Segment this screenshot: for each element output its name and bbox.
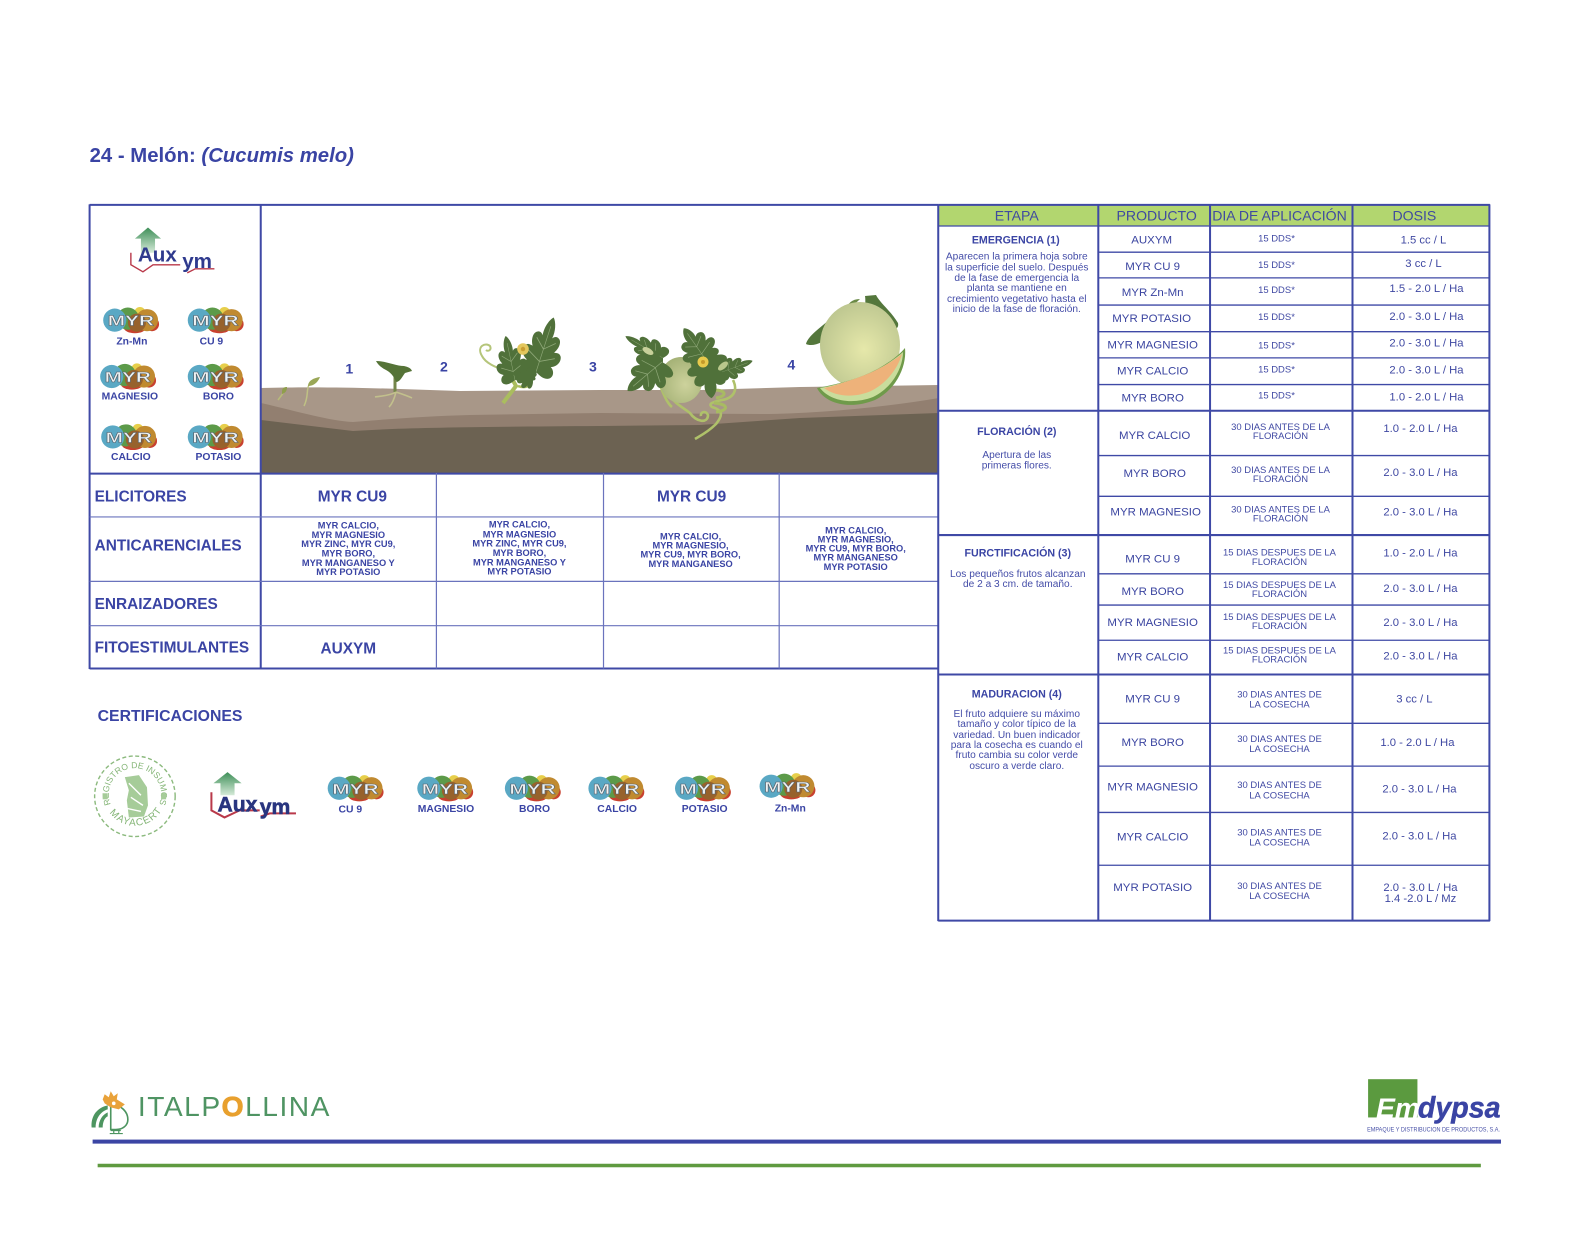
column: día de aplicación: LA COSECHA: [1249, 700, 1310, 711]
stage: fructificación: Los pequeños frutos alcanzan: [950, 569, 1086, 580]
column: dosis: 1.4 -2.0 L / Mz: [1385, 893, 1457, 905]
stage: maduración: fruto cambia su color verde: [956, 750, 1078, 761]
cell: anticarenciales stage 3: MYR MANGANESO: [648, 559, 733, 569]
stage: emergencia: [945, 235, 1088, 315]
logo: Auxym: [131, 228, 214, 273]
stage: emergencia: planta se mantiene en: [967, 283, 1067, 294]
column: día de aplicación: 30 DIAS ANTES DE: [1237, 780, 1322, 791]
logo: Italpollina: [92, 1090, 331, 1134]
cell: elicitor stage 1: MYR CU9: [318, 488, 387, 505]
table header band: [938, 205, 1489, 226]
logo: Emdypsa: dypsa: [1418, 1092, 1500, 1124]
column: día de aplicación: LA COSECHA: [1249, 838, 1310, 849]
cell: anticarenciales stage 4: MYR CALCIO,: [825, 526, 886, 536]
stage: maduración: tamaño y color típico de la: [957, 719, 1076, 730]
column: dosis: 1.0 - 2.0 L / Ha: [1383, 423, 1458, 435]
cell: anticarenciales stage 1: MYR MAGNESIO: [312, 530, 385, 540]
row label: enraizadores: ENRAIZADORES: [95, 596, 218, 613]
logo: Magnesio: MAGNESIO: [418, 804, 474, 815]
cell: anticarenciales stage 3: MYR MAGNESIO,: [653, 541, 729, 551]
column: productos: MYR CU 9: [1125, 694, 1180, 706]
column: productos: MYR MAGNESIO: [1107, 781, 1198, 793]
stage: maduración: MADURACION (4): [972, 689, 1062, 701]
column: dosis: 1.5 - 2.0 L / Ha: [1389, 283, 1464, 295]
column: dosis: 1.0 - 2.0 L / Ha: [1383, 548, 1458, 560]
logo: MYR Boro: MYR: [192, 369, 239, 386]
cell: anticarenciales stage 4: MYR POTASIO: [824, 562, 888, 572]
column: dosis: 2.0 - 3.0 L / Ha: [1383, 650, 1458, 662]
column: día de aplicación: 15 DDS*: [1258, 234, 1295, 245]
column: día de aplicación: 15 DDS*: [1258, 391, 1295, 402]
table header band: PRODUCTO: [1117, 207, 1197, 223]
stage: floración: [977, 425, 1057, 472]
stage: maduración: para la cosecha es cuando el: [951, 740, 1083, 751]
column: dosis: 1.5 cc / L: [1401, 235, 1446, 247]
column: día de aplicación: 15 DIAS DESPUES DE LA: [1223, 580, 1337, 591]
column: productos: MYR Zn-Mn: [1122, 287, 1184, 299]
column: día de aplicación: [1223, 234, 1337, 902]
column: productos: MYR BORO: [1121, 393, 1184, 405]
column: dosis: 2.0 - 3.0 L / Ha: [1382, 783, 1457, 795]
column: dosis: 2.0 - 3.0 L / Ha: [1383, 506, 1458, 518]
column: día de aplicación: 30 DIAS ANTES DE: [1237, 734, 1322, 745]
logo: MYR Potasio: MYR: [192, 429, 239, 446]
column: productos: MYR MAGNESIO: [1107, 617, 1198, 629]
column: dosis: 3 cc / L: [1396, 694, 1433, 706]
logo: Magnesio: MYR: [422, 781, 468, 798]
column: productos: MYR CU 9: [1125, 554, 1180, 566]
column: día de aplicación: 30 DIAS ANTES DE: [1237, 690, 1322, 701]
cell: anticarenciales stage 1: MYR POTASIO: [316, 567, 380, 577]
logo: Auxym: ym: [182, 250, 212, 273]
logo: MYR Potasio: [188, 424, 244, 463]
cell: anticarenciales stage 2: MYR BORO,: [493, 548, 546, 558]
table header band: DOSIS: [1392, 207, 1436, 223]
column: día de aplicación: FLORACIÓN: [1252, 589, 1307, 600]
column: dosis: 2.0 - 3.0 L / Ha: [1389, 337, 1464, 349]
column: productos: MYR POTASIO: [1112, 313, 1191, 325]
panel: product logos: [100, 228, 244, 463]
column: día de aplicación: FLORACIÓN: [1252, 557, 1307, 568]
logo: MYR CU 9: MYR: [192, 313, 239, 330]
heading: certificaciones: CERTIFICACIONES: [98, 708, 242, 725]
logo: MYR Zn-Mn: Zn-Mn: [116, 336, 147, 347]
stage: emergencia: crecimiento vegetativo hasta el: [947, 294, 1086, 305]
column: dosis: 1.0 - 2.0 L / Ha: [1380, 737, 1455, 749]
cell: anticarenciales stage 4: MYR CU9, MYR BORO,: [806, 544, 906, 554]
logo: CU 9: MYR: [332, 781, 379, 798]
stage: maduración: oscuro a verde claro.: [969, 761, 1064, 772]
column: productos: MYR CALCIO: [1117, 366, 1188, 378]
logo: Auxym certification: ym: [260, 796, 290, 819]
cell: anticarenciales stage 4: MYR MANGANESO: [814, 553, 898, 563]
logo: MYR Calcio: [101, 424, 157, 463]
panel: certification logos: [94, 755, 816, 838]
column: día de aplicación: 15 DIAS DESPUES DE LA: [1223, 548, 1337, 559]
logo: Calcio: [588, 775, 644, 815]
logo: Emdypsa: Em: [1376, 1091, 1420, 1123]
stage: maduración: [951, 689, 1083, 772]
logo: Boro: MYR: [509, 781, 556, 798]
logo: CU 9: [328, 775, 384, 815]
footer rule: green: [98, 1164, 1481, 1167]
logo: MYR Zn-Mn: MYR: [108, 313, 154, 330]
column: día de aplicación: FLORACIÓN: [1253, 431, 1308, 442]
logo: MYR Boro: [188, 363, 244, 403]
logo: Auxym certification: [211, 772, 296, 819]
logo: Zn-Mn: [760, 773, 815, 814]
logo: Magnesio: [417, 775, 474, 815]
column: día de aplicación: 15 DDS*: [1258, 285, 1295, 296]
stage: fructificación: de 2 a 3 cm. de tamaño.: [963, 579, 1073, 590]
column: dosis: 2.0 - 3.0 L / Ha: [1383, 467, 1458, 479]
column: productos: MYR CALCIO: [1119, 430, 1190, 442]
stamp: Mayacert: MAYACERT: [110, 806, 160, 826]
column: productos: MYR BORO: [1123, 468, 1186, 480]
logo: Emdypsa: [1367, 1079, 1500, 1134]
column: día de aplicación: 15 DIAS DESPUES DE LA: [1223, 612, 1337, 623]
column: productos: MYR BORO: [1121, 586, 1184, 598]
row label: anticarenciales: ANTICARENCIALES: [95, 538, 242, 555]
logo: MYR Magnesio: [100, 363, 158, 403]
column: día de aplicación: 30 DIAS ANTES DE: [1237, 881, 1322, 892]
stage: emergencia: la superficie del suelo. Después: [945, 262, 1088, 273]
column: productos: AUXYM: [1131, 235, 1172, 247]
illustration: young plant with first leaf: [375, 361, 412, 407]
stamp: Mayacert: [94, 755, 176, 838]
column: día de aplicación: 15 DDS*: [1258, 260, 1295, 271]
stage: floración: primeras flores.: [982, 461, 1052, 472]
cell: anticarenciales stage 4: MYR MAGNESIO,: [818, 535, 894, 545]
stamp: Mayacert: REGISTRO DE INSUMOS: [102, 762, 167, 806]
stage number 1: 1: [345, 360, 353, 376]
column: dosis: 2.0 - 3.0 L / Ha: [1383, 617, 1458, 629]
column: día de aplicación: 15 DIAS DESPUES DE LA: [1223, 645, 1337, 656]
column: día de aplicación: LA COSECHA: [1249, 891, 1310, 902]
logo: MYR CU 9: [188, 307, 244, 347]
stage: floración: FLORACIÓN (2): [977, 425, 1057, 438]
column: productos: MYR CU 9: [1125, 261, 1180, 273]
panel: product category table: [90, 204, 938, 669]
column: productos: [1107, 235, 1201, 894]
column: día de aplicación: FLORACIÓN: [1253, 513, 1308, 524]
logo: Zn-Mn: MYR: [764, 779, 811, 796]
column: dosis: 2.0 - 3.0 L / Ha: [1389, 311, 1464, 323]
column: dosis: 2.0 - 3.0 L / Ha: [1383, 583, 1458, 595]
cell: anticarenciales stage 4: [806, 526, 906, 572]
logo: Calcio: CALCIO: [597, 804, 637, 815]
title: 24 - Melón: (Cucumis melo): [90, 145, 354, 167]
cell: anticarenciales stage 1: MYR MANGANESO Y: [302, 558, 396, 568]
column: dosis: 2.0 - 3.0 L / Ha: [1382, 831, 1457, 843]
cell: anticarenciales stage 1: MYR CALCIO,: [318, 521, 379, 531]
cell: fitoestimulante stage 1: AUXYM: [321, 640, 376, 657]
cell: elicitor stage 3: MYR CU9: [657, 488, 726, 505]
row label: fitoestimulantes: FITOESTIMULANTES: [95, 639, 249, 656]
cell: anticarenciales stage 3: MYR CU9, MYR BORO,: [640, 550, 741, 560]
column: día de aplicación: LA COSECHA: [1249, 790, 1310, 801]
column: día de aplicación: FLORACIÓN: [1252, 654, 1307, 665]
soil layers: [261, 385, 939, 474]
cell: anticarenciales stage 2: MYR POTASIO: [487, 566, 551, 576]
column: día de aplicación: 30 DIAS ANTES DE LA: [1231, 465, 1331, 476]
wordmark: ITALPOLLINA: [138, 1090, 331, 1122]
logo: Calcio: MYR: [593, 781, 639, 798]
stage: maduración: variedad. Un buen indicador: [953, 730, 1081, 741]
stage: emergencia: Aparecen la primera hoja sobre: [946, 252, 1088, 263]
cell: anticarenciales stage 2: [472, 520, 567, 576]
column: día de aplicación: 15 DDS*: [1258, 312, 1295, 323]
logo: MYR Calcio: CALCIO: [111, 452, 151, 463]
cell: anticarenciales stage 1: MYR ZINC, MYR CU9,: [301, 539, 395, 549]
stage: maduración: El fruto adquiere su máximo: [954, 709, 1080, 720]
logo: Potasio: POTASIO: [682, 804, 728, 815]
panel: crop growth stages illustration: [261, 295, 939, 474]
logo: MYR Magnesio: MYR: [105, 369, 151, 386]
illustration: seedlings sprouting: [278, 377, 320, 406]
column: día de aplicación: 15 DDS*: [1258, 364, 1295, 375]
logo: CU 9: CU 9: [339, 804, 362, 815]
stage: emergencia: inicio de la fase de floración.: [953, 304, 1081, 315]
column: productos: MYR POTASIO: [1113, 882, 1192, 894]
logo: MYR CU 9: CU 9: [200, 336, 223, 347]
logo: MYR Boro: BORO: [203, 392, 234, 403]
column: día de aplicación: 30 DIAS ANTES DE LA: [1231, 422, 1331, 433]
logo: Boro: [505, 775, 561, 815]
column: productos: MYR CALCIO: [1117, 832, 1188, 844]
column: dosis: 2.0 - 3.0 L / Ha: [1383, 882, 1458, 894]
column: dosis: 3 cc / L: [1405, 258, 1442, 270]
logo: Boro: BORO: [519, 804, 550, 815]
footer rule: blue: [93, 1140, 1501, 1144]
stage: emergencia: EMERGENCIA (1): [972, 235, 1060, 247]
logo: Potasio: [675, 775, 731, 815]
column: día de aplicación: 30 DIAS ANTES DE LA: [1231, 504, 1331, 515]
table header band: DIA DE APLICACIÓN: [1212, 207, 1347, 223]
logo: MYR Calcio: MYR: [106, 429, 152, 446]
stage: fructificación: FURCTIFICACIÓN (3): [964, 547, 1071, 560]
illustration: flowering plant: [480, 311, 572, 403]
panel: application schedule table: [938, 204, 1490, 921]
logo: Zn-Mn: Zn-Mn: [775, 803, 806, 814]
stage number 2: 2: [440, 358, 448, 374]
column: productos: MYR BORO: [1121, 737, 1184, 749]
logo: MYR Zn-Mn: [103, 307, 159, 347]
column: día de aplicación: FLORACIÓN: [1252, 621, 1307, 632]
column: día de aplicación: 15 DDS*: [1258, 340, 1295, 351]
stage number 3: 3: [589, 358, 597, 374]
column: día de aplicación: LA COSECHA: [1249, 744, 1310, 755]
cell: anticarenciales stage 1: [301, 521, 396, 577]
row label: elicitores: ELICITORES: [95, 488, 187, 505]
column: dosis: 2.0 - 3.0 L / Ha: [1389, 364, 1464, 376]
logo: MYR Potasio: POTASIO: [196, 452, 241, 463]
illustration: plant with young fruit: [614, 318, 756, 439]
cell: anticarenciales stage 3: [640, 532, 741, 569]
icon: rooster: [92, 1091, 128, 1134]
column: día de aplicación: FLORACIÓN: [1253, 474, 1308, 485]
cell: anticarenciales stage 2: MYR CALCIO,: [489, 520, 550, 530]
cell: anticarenciales stage 2: MYR MANGANESO Y: [473, 557, 567, 567]
illustration: ripe melon with slice: [806, 295, 905, 405]
logo: Potasio: MYR: [680, 781, 726, 798]
column: productos: MYR MAGNESIO: [1107, 339, 1198, 351]
cell: anticarenciales stage 1: MYR BORO,: [322, 549, 375, 559]
column: día de aplicación: 30 DIAS ANTES DE: [1237, 828, 1322, 839]
cell: anticarenciales stage 2: MYR ZINC, MYR CU9,: [472, 539, 566, 549]
stage number 4: 4: [787, 356, 795, 372]
logo: MYR Magnesio: MAGNESIO: [102, 392, 158, 403]
column: dosis: [1380, 235, 1464, 905]
logo: Emdypsa: EMPAQUE Y DISTRIBUCION DE PRODUCTOS, S.A.: [1367, 1128, 1500, 1134]
logo: Auxym certification: Aux: [217, 793, 258, 816]
cell: anticarenciales stage 3: MYR CALCIO,: [660, 532, 721, 542]
column: dosis: 1.0 - 2.0 L / Ha: [1389, 392, 1464, 404]
stage: emergencia: de la fase de emergencia la: [954, 273, 1079, 284]
column: productos: MYR MAGNESIO: [1110, 506, 1201, 518]
column: productos: MYR CALCIO: [1117, 651, 1188, 663]
cell: anticarenciales stage 2: MYR MAGNESIO: [483, 530, 556, 540]
stage: fructificación: [950, 547, 1086, 590]
stage: floración: Apertura de las: [982, 450, 1051, 461]
table header band: ETAPA: [995, 207, 1039, 223]
logo: Auxym: Aux: [138, 244, 177, 267]
